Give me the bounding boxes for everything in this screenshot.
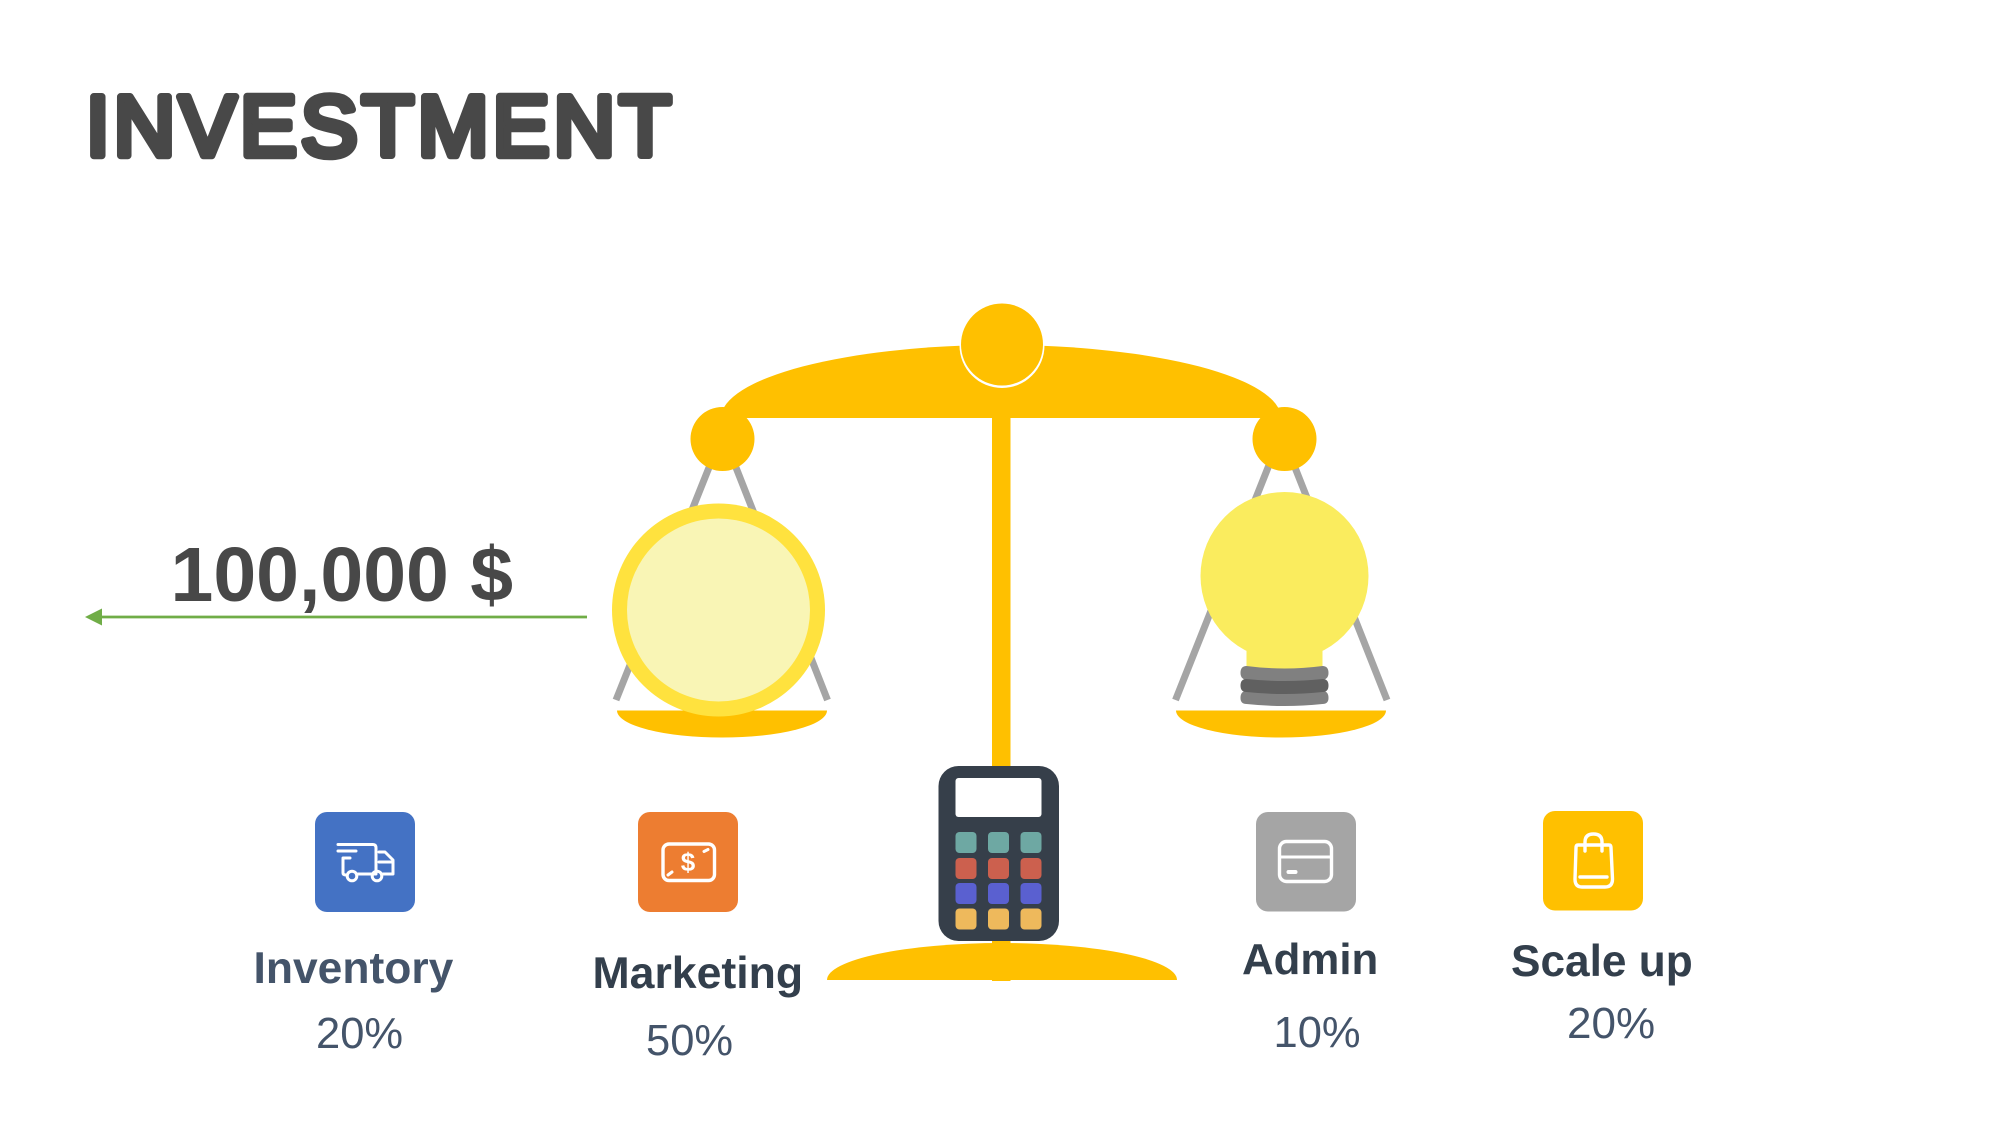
- right pan strings: [1176, 465, 1387, 700]
- left pan strings: [616, 465, 828, 700]
- panel: inventory: [254, 812, 454, 1058]
- title: INVESTMENT: [86, 80, 671, 174]
- label: scale up: Scale up: [1511, 937, 1693, 986]
- total amount: 100,000 $: [170, 532, 513, 618]
- value: 10%: 10%: [1274, 1009, 1361, 1057]
- scale beam: [721, 345, 1281, 418]
- value: 50%: 50%: [646, 1017, 733, 1065]
- panel: scale up: [1511, 811, 1693, 1048]
- arrow: amount pointer: [85, 608, 587, 626]
- panel: marketing: [592, 812, 803, 1065]
- label: inventory: Inventory: [254, 944, 454, 993]
- icon: money note: $: [681, 847, 696, 877]
- left hinge ball: [690, 407, 754, 471]
- icon: shopping bag: [1543, 811, 1643, 910]
- icon: coin: [612, 504, 825, 716]
- right hinge ball: [1252, 407, 1316, 471]
- label: admin: Admin: [1242, 935, 1378, 984]
- scale pole: [992, 410, 1010, 981]
- icon: light bulb: [1200, 492, 1368, 706]
- value: 20%: 20%: [1567, 999, 1655, 1048]
- left pan: [617, 710, 827, 738]
- right pan: [1176, 710, 1386, 738]
- icon: money note: [638, 812, 738, 912]
- scale base: [827, 943, 1177, 980]
- label: marketing: Marketing: [592, 949, 803, 998]
- value: 20%: 20%: [316, 1010, 403, 1058]
- icon: credit card: [1256, 812, 1356, 912]
- top pivot ball: [960, 303, 1044, 388]
- icon: calculator: [938, 766, 1059, 941]
- balance scale: [616, 303, 1387, 981]
- icon: delivery truck: [315, 812, 415, 912]
- panel: admin: [1242, 812, 1378, 1057]
